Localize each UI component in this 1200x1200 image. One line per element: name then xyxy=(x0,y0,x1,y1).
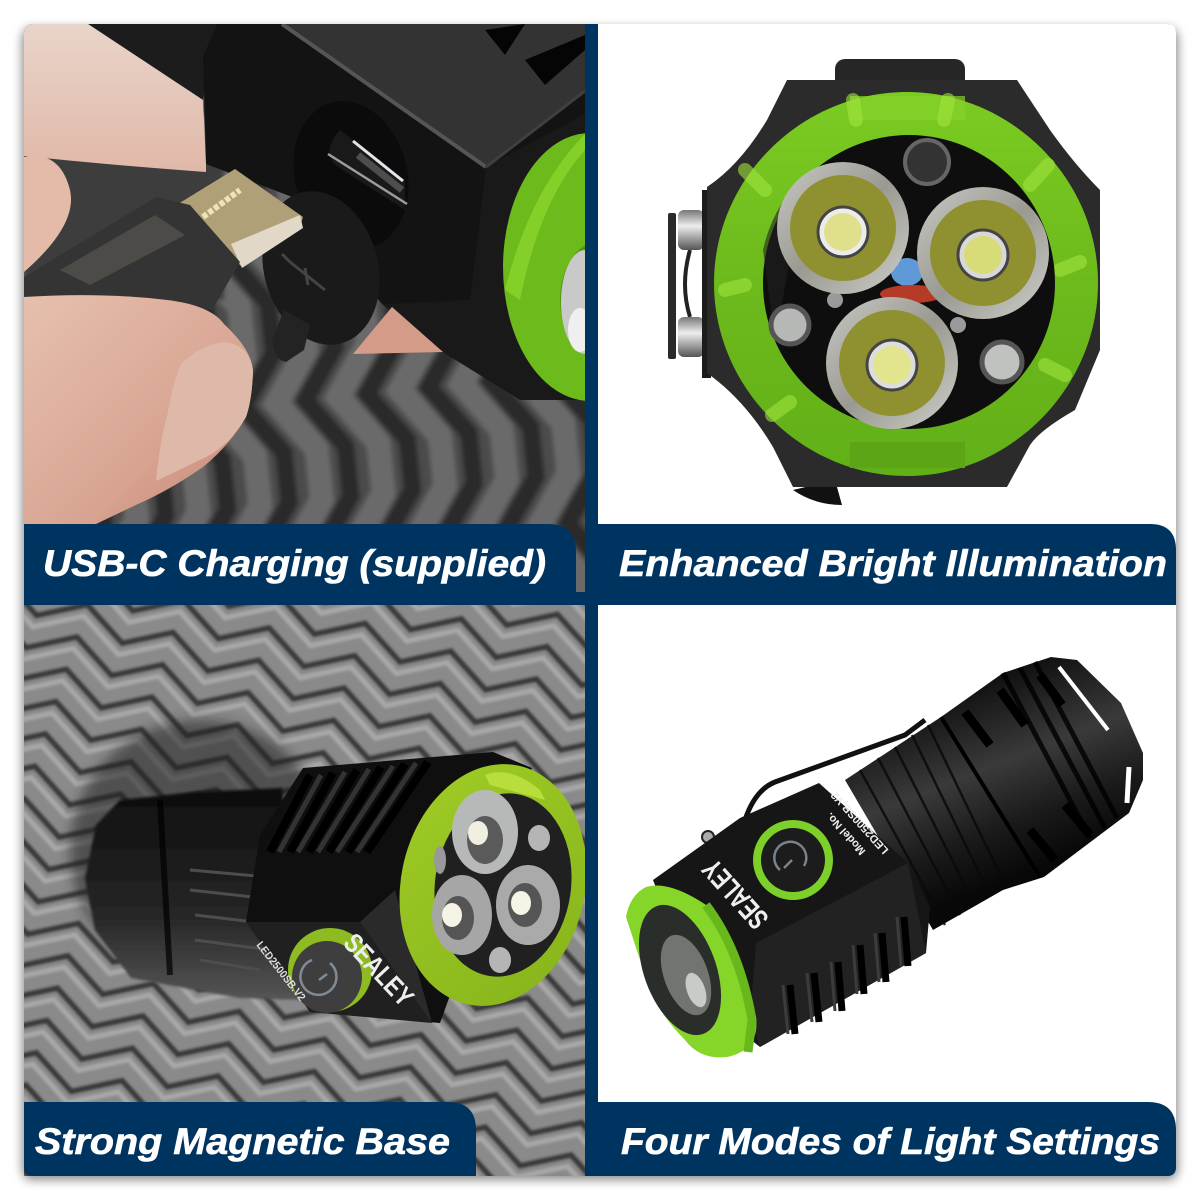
photo: wires xyxy=(827,258,966,333)
photo: clip wire xyxy=(702,720,925,843)
panel: USB-C charging photo xyxy=(24,24,585,592)
photo: upper finger xyxy=(24,24,206,172)
label: USB-C Charging xyxy=(24,524,585,605)
photo: green ring and LEDs xyxy=(400,764,585,1006)
photo: flashlight head: Model No. xyxy=(824,810,868,857)
label: Four Modes of Light Settings: Four Modes of Light Settings xyxy=(621,1121,1160,1162)
photo: flashlight head xyxy=(653,783,930,1047)
photo: flashlight tube and body xyxy=(88,24,585,400)
photo: green bezel xyxy=(503,133,585,401)
photo: dark gap below finger xyxy=(24,150,224,300)
photo: USB-C cable and plug xyxy=(24,169,303,310)
panel: Strong Magnetic Base xyxy=(14,595,608,1186)
panel: Four Modes of Light Settings xyxy=(598,605,1176,1145)
photo: LEDs xyxy=(771,140,1049,429)
photo: flashlight head: SEALEY xyxy=(697,852,775,935)
photo: left fingertip xyxy=(24,156,71,272)
photo: vents xyxy=(270,762,428,852)
photo: clip xyxy=(668,190,711,378)
photo: thumb xyxy=(24,295,253,524)
label: Strong Magnetic Base xyxy=(24,1102,476,1176)
photo: black octagon head xyxy=(707,59,1100,505)
photo: soft shadow xyxy=(62,712,310,948)
label: Strong Magnetic Base: Strong Magnetic Base xyxy=(35,1121,450,1162)
photo: background finger behind xyxy=(353,307,443,354)
photo: USB-C port xyxy=(294,102,408,241)
label: Enhanced Bright Illumination: Enhanced Bright Illumination xyxy=(619,543,1167,584)
photo: rubber port cover xyxy=(262,192,378,362)
divider strip xyxy=(585,605,598,1176)
photo: flashlight head: SEALEY xyxy=(338,928,420,1012)
label: Enhanced Bright Illumination xyxy=(585,524,1176,605)
photo: green bezel and lens xyxy=(623,886,756,1057)
photo: flashlight head xyxy=(246,752,532,1023)
photo: flashlight tube xyxy=(85,788,300,1000)
photo: flashlight head: LED2500SB.V2 xyxy=(829,789,891,856)
photo: vents xyxy=(783,917,908,1034)
photo: flashlight head: LED2500SB.V2 xyxy=(254,939,307,1004)
label: USB-C Charging: USB-C Charging (supplied) xyxy=(43,543,546,584)
label: Four Modes of Light Settings xyxy=(585,1102,1176,1176)
panel: Enhanced Bright Illumination xyxy=(598,24,1176,564)
photo: flashlight tube xyxy=(845,657,1143,930)
photo: green bezel xyxy=(714,92,1098,476)
